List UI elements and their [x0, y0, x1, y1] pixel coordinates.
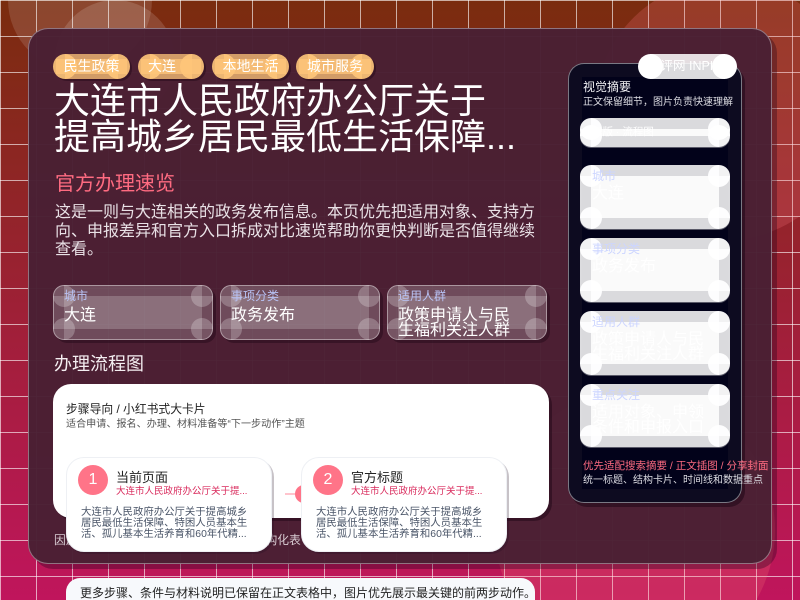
- flow chart title: 步骤导向 / 小红书式大卡片: [66, 402, 206, 416]
- glass card: 城市: 大连: [64, 307, 96, 324]
- step card 1: [66, 457, 272, 552]
- glass card: 适用人群: [387, 285, 547, 340]
- tag: 本地生活: [212, 54, 289, 79]
- description: 这是一则与大连相关的政务发布信息。本页优先把适用对象、支持方: [55, 204, 535, 221]
- source pill: 点评网 INPIR: [648, 59, 722, 73]
- step card 1: 当前页面: [116, 470, 168, 485]
- title: 大连市人民政府办公厅关于: [54, 80, 486, 121]
- sidebar card: 城市: 城市: [592, 169, 616, 183]
- sidebar heading: 视觉摘要: [583, 80, 631, 94]
- subheading: 官方办理速览: [55, 173, 175, 195]
- sidebar footer line: 统一标题、结构卡片、时间线和数据重点: [583, 475, 763, 486]
- sidebar accent line: 优先适配搜索摘要 / 正文插图 / 分享封面: [583, 460, 769, 472]
- step card 1: 大连市人民政府办公厅关于提高城乡居民最低生活保障、特困人员基本生活、孤儿基本生活养育和60年代精...: [81, 507, 247, 540]
- step card 2: 2: [324, 471, 332, 488]
- caption behind step cards: 因篇幅限制，更多内容已在正文中通过结构化表: [54, 534, 301, 547]
- step card 2: 官方标题: [351, 470, 403, 485]
- sidebar card: 事项分类: 事项分类: [592, 242, 640, 256]
- glass card: 城市: 城市: [64, 289, 88, 303]
- sidebar subheading: 正文保留细节，图片负责快速理解: [583, 97, 733, 108]
- source pill: [638, 54, 737, 79]
- arrow between steps: [285, 486, 301, 502]
- flow chart subtitle: 适合申请、报名、办理、材料准备等“下一步动作”主题: [66, 419, 305, 430]
- sidebar card: 城市: 大连: [592, 185, 624, 202]
- note box: [66, 578, 535, 600]
- step card 1: 大连市人民政府办公厅关于提...: [116, 486, 247, 497]
- sidebar card: 适用人群: 适用人群: [592, 315, 640, 329]
- description: [55, 203, 535, 258]
- tag: 城市服务: [296, 54, 374, 79]
- sidebar card: 重点关注: 重点关注: [592, 388, 640, 402]
- sidebar card: 事项分类: 政务发布: [592, 258, 656, 275]
- tag: 民生政策: [53, 54, 130, 79]
- section heading: flow chart: 办理流程图: [54, 354, 144, 374]
- sidebar card: 版式: 竖版 · 流程图: [592, 126, 654, 138]
- step card 2: [301, 457, 507, 552]
- step card 2: 大连市人民政府办公厅关于提...: [351, 486, 482, 497]
- title: [54, 80, 516, 157]
- description: 查看。: [55, 241, 103, 258]
- panel: flow chart: [53, 384, 549, 518]
- description: 向、申报差异和官方入口拆成对比速览帮助你更快判断是否值得继续: [55, 222, 535, 240]
- tag: 大连: 大连: [148, 58, 176, 74]
- tag: 大连: [138, 54, 204, 79]
- step card 2: 大连市人民政府办公厅关于提高城乡居民最低生活保障、特困人员基本生活、孤儿基本生活养育和60年代精...: [316, 507, 482, 540]
- tag: 民生政策: 民生政策: [64, 58, 120, 74]
- note box: 更多步骤、条件与材料说明已保留在正文表格中，图片优先展示最关键的前两步动作。: [80, 586, 536, 600]
- glass card: 城市: [53, 285, 213, 340]
- glass card: 事项分类: 政务发布: [231, 307, 295, 324]
- sidebar card: 版式: [580, 118, 730, 147]
- sidebar card: 城市: [580, 165, 730, 229]
- title: 提高城乡居民最低生活保障...: [54, 116, 516, 157]
- tag: 城市服务: 城市服务: [307, 58, 363, 74]
- glass card: 事项分类: [220, 285, 380, 340]
- glass card: 适用人群: 适用人群: [398, 289, 446, 303]
- glass card: 事项分类: 事项分类: [231, 289, 279, 303]
- sidebar card: 重点关注: 适用对象、申领条件和申报入口: [592, 404, 704, 436]
- sidebar card: 适用人群: 政策申请人与民生福利关注人群: [592, 331, 704, 363]
- sidebar card: 事项分类: [580, 238, 730, 302]
- panel: visual summary sidebar: [568, 63, 742, 503]
- sidebar card: 适用人群: [580, 311, 730, 375]
- glass card: 适用人群: 政策申请人与民生福利关注人群: [398, 307, 510, 339]
- tag: 本地生活: 本地生活: [222, 58, 278, 74]
- step card 1: 1: [89, 471, 97, 488]
- sidebar card: 重点关注: [580, 384, 730, 447]
